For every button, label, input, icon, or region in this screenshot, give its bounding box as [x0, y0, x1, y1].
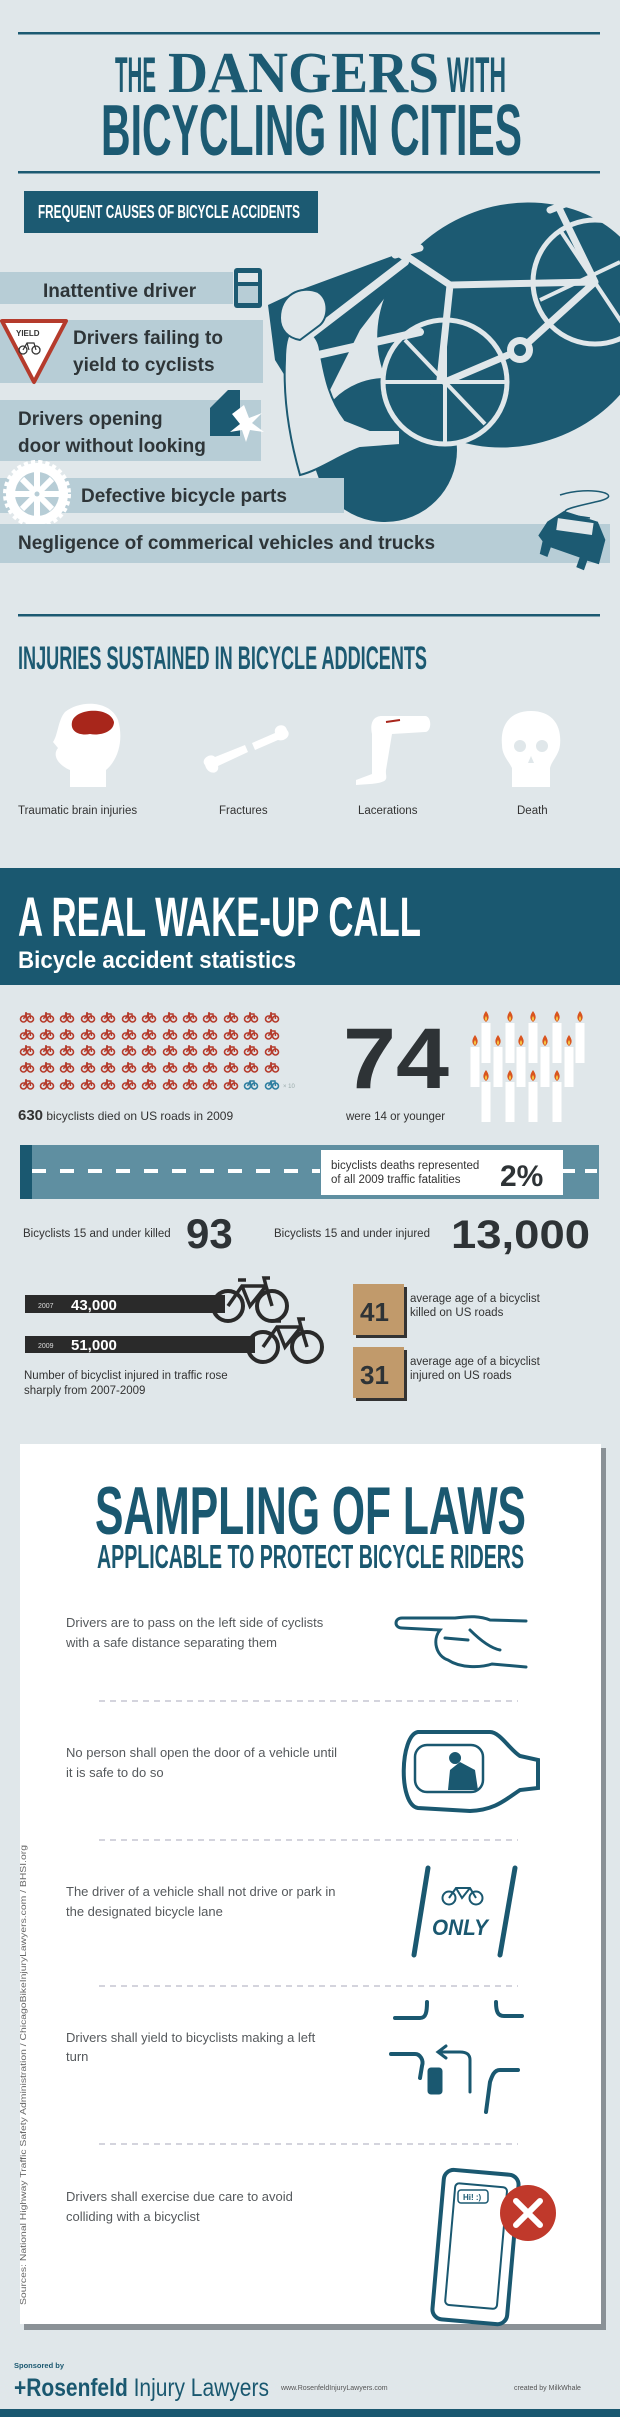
law 3 [66, 1884, 336, 1919]
stat: 15 and under killed [23, 1210, 233, 1257]
stat: 15 and under injured: Bicyclists 15 and under injured [274, 1228, 430, 1240]
cause: defective bicycle parts: Defective bicycle parts [81, 486, 287, 507]
icon: car [534, 491, 609, 573]
footer: sponsor: +Rosenfeld Injury Lawyers [14, 2374, 269, 2402]
law 2 [66, 1745, 337, 1780]
law 1: Drivers are to pass on the left side of cyclists [66, 1615, 324, 1630]
road: 2% traffic fatalities [20, 1145, 599, 1199]
icon: phone with no symbol [432, 2169, 556, 2325]
icon: side mirror [404, 1732, 538, 1811]
stat: 630 bicyclists died: 630 bicyclists died on US roads in 2009 [18, 1107, 233, 1124]
footer: sponsor: www.RosenfeldInjuryLawyers.com [280, 2385, 388, 2392]
bar chart: injured 2007 vs 2009: sharply from 2007-2009 [24, 1385, 145, 1397]
banner: frequent causes: FREQUENT CAUSES OF BICYCLE ACCIDENTS [38, 202, 300, 222]
footer: sponsor: created by MilkWhale [514, 2385, 581, 2392]
stat: average age killed 41: killed on US roads [410, 1307, 504, 1319]
title: WITH [447, 47, 506, 103]
panel: sampling of laws [18, 1444, 606, 2330]
law 4: turn [66, 2049, 88, 2064]
stat: 15 and under killed: 93 [186, 1210, 233, 1257]
cause: drivers opening door: Drivers opening [18, 409, 163, 430]
injury: traumatic brain injuries [18, 704, 137, 817]
injury: death [502, 711, 560, 817]
law 4 [66, 2030, 316, 2064]
injury: death: Death [517, 805, 548, 817]
cause: drivers opening door [0, 390, 264, 461]
icon: yield sign [2, 321, 66, 382]
bar chart: injured 2007 vs 2009: 43,000 [71, 1297, 117, 1314]
icon: bike lane only [414, 1868, 515, 1955]
icon: yield sign: YIELD [16, 329, 40, 338]
stat: average age injured 31 [353, 1347, 541, 1401]
divider [18, 614, 600, 616]
title: DANGERS [168, 40, 439, 105]
stat: 15 and under injured [274, 1213, 590, 1257]
title [18, 32, 600, 174]
road: 2% traffic fatalities: 2% [500, 1160, 543, 1193]
cause: inattentive driver [0, 268, 262, 308]
title: THE [115, 47, 156, 103]
stat: average age injured 31: injured on US roads [410, 1370, 512, 1382]
icon: bike lane only: ONLY [432, 1915, 490, 1940]
icon: phone [234, 268, 262, 308]
bar chart: injured 2007 vs 2009: 2007 [38, 1303, 54, 1310]
icon: pointing hand [396, 1617, 526, 1667]
heading: sampling of laws [95, 1473, 526, 1575]
chart: bike pictogram grid [20, 1013, 296, 1090]
road: 2% traffic fatalities: bicyclists deaths represented [331, 1160, 479, 1172]
injury: fractures: Fractures [219, 805, 268, 817]
stat: average age killed 41: average age of a bicyclist [410, 1293, 541, 1305]
law 3: The driver of a vehicle shall not drive or park in [66, 1884, 336, 1899]
stat: average age killed 41 [353, 1284, 541, 1338]
icon: candles [470, 1011, 584, 1122]
cause: drivers failing to yield: Drivers failing to [73, 328, 223, 349]
cause: drivers failing to yield: yield to cyclists [73, 355, 215, 376]
injury: lacerations [356, 716, 430, 817]
bar chart: injured 2007 vs 2009: Number of bicyclist injured in traffic rose [24, 1370, 228, 1382]
bar chart: injured 2007 vs 2009 [24, 1278, 322, 1397]
icon: phone with no symbol: Hi! :) [463, 2193, 482, 2202]
chart: bike pictogram grid: × 10 [283, 1084, 296, 1090]
banner: a real wake-up call: Bicycle accident statistics [18, 947, 296, 974]
stat: average age injured 31: average age of a bicyclist [410, 1356, 541, 1368]
stat: 15 and under injured: 13,000 [451, 1213, 590, 1257]
law 5: colliding with a bicyclist [66, 2209, 200, 2224]
injury: fractures [204, 725, 289, 817]
illustration: cyclist falling with bike [268, 164, 620, 522]
footer: sponsor [14, 2361, 581, 2402]
stat: 74 were 14 or younger: were 14 or younger [345, 1111, 445, 1123]
footer: sponsor: Sponsored by [14, 2361, 65, 2370]
icon: gear [6, 463, 68, 525]
icon: intersection [391, 2002, 522, 2112]
stat: average age killed 41: 41 [360, 1297, 389, 1327]
banner: a real wake-up call [0, 868, 620, 985]
law 5: Drivers shall exercise due care to avoid [66, 2189, 293, 2204]
banner: frequent causes [24, 191, 318, 233]
cause: negligence of commercial vehicles: Negligence of commerical vehicles and trucks [18, 533, 435, 554]
cause: drivers failing to yield [0, 320, 263, 383]
law 1: with a safe distance separating them [65, 1635, 277, 1650]
cause: drivers opening door: door without looking [18, 436, 206, 457]
sources: Sources: National Highway Traffic Safety Administration / ChicagoBikeInjuryLawyers.com / BHSI.org [18, 1845, 28, 2305]
stat: average age injured 31: 31 [360, 1360, 389, 1390]
injury: lacerations: Lacerations [358, 805, 418, 817]
cause: inattentive driver: Inattentive driver [43, 281, 197, 302]
road: 2% traffic fatalities: of all 2009 traffic fatalities [331, 1174, 461, 1186]
cause: negligence of commercial vehicles [0, 491, 610, 573]
bar chart: injured 2007 vs 2009: 51,000 [71, 1337, 117, 1354]
law 3: the designated bicycle lane [66, 1904, 223, 1919]
injury: traumatic brain injuries: Traumatic brain injuries [18, 805, 137, 817]
law 1 [65, 1615, 324, 1650]
law 5 [66, 2189, 293, 2224]
stat: 74 were 14 or younger: 74 [343, 1011, 449, 1107]
stat: 15 and under killed: Bicyclists 15 and under killed [23, 1228, 171, 1240]
law 2: No person shall open the door of a vehicle until [66, 1745, 337, 1760]
bar chart: injured 2007 vs 2009: 2009 [38, 1343, 54, 1350]
law 4: Drivers shall yield to bicyclists making a left [66, 2030, 316, 2045]
bottom strip [0, 2409, 620, 2417]
law 2: it is safe to do so [66, 1765, 164, 1780]
cause: defective bicycle parts [0, 463, 344, 525]
icon: car door [210, 390, 264, 442]
